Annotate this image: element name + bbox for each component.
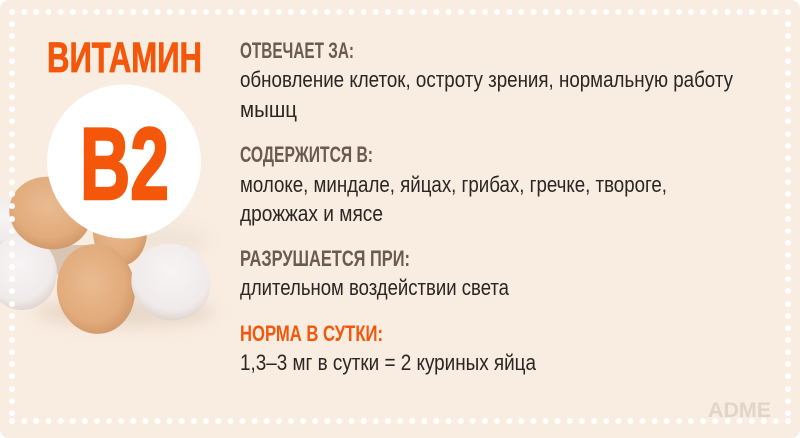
heading: contained in: СОДЕРЖИТСЯ В: xyxy=(240,142,373,167)
body: daily norm: 1,3–3 мг в сутки = 2 куриных яйца xyxy=(240,350,537,375)
text block: destroyed by xyxy=(240,246,510,300)
watermark: ADME: ADME xyxy=(708,399,771,422)
heading: daily norm: НОРМА В СУТКИ: xyxy=(240,321,383,346)
body: responsible for line 2: мышц xyxy=(240,97,297,122)
body: contained in line 1: молоке, миндале, яйцах, грибах, гречке, твороге, xyxy=(240,172,667,197)
body: contained in line 2: дрожжах и мясе xyxy=(240,201,383,226)
badge label: B2: B2 xyxy=(80,107,169,221)
text block: responsible for xyxy=(240,38,733,122)
eggs illustration xyxy=(0,176,211,334)
title: витамин: ВИТАМИН xyxy=(47,34,202,82)
heading: responsible for: ОТВЕЧАЕТ ЗА: xyxy=(240,38,354,63)
text block: contained in xyxy=(240,142,667,226)
body: destroyed by: длительном воздействии света xyxy=(240,275,510,300)
heading: destroyed by: РАЗРУШАЕТСЯ ПРИ: xyxy=(240,246,410,271)
white circle badge xyxy=(47,84,201,238)
text block: daily norm xyxy=(240,321,537,375)
